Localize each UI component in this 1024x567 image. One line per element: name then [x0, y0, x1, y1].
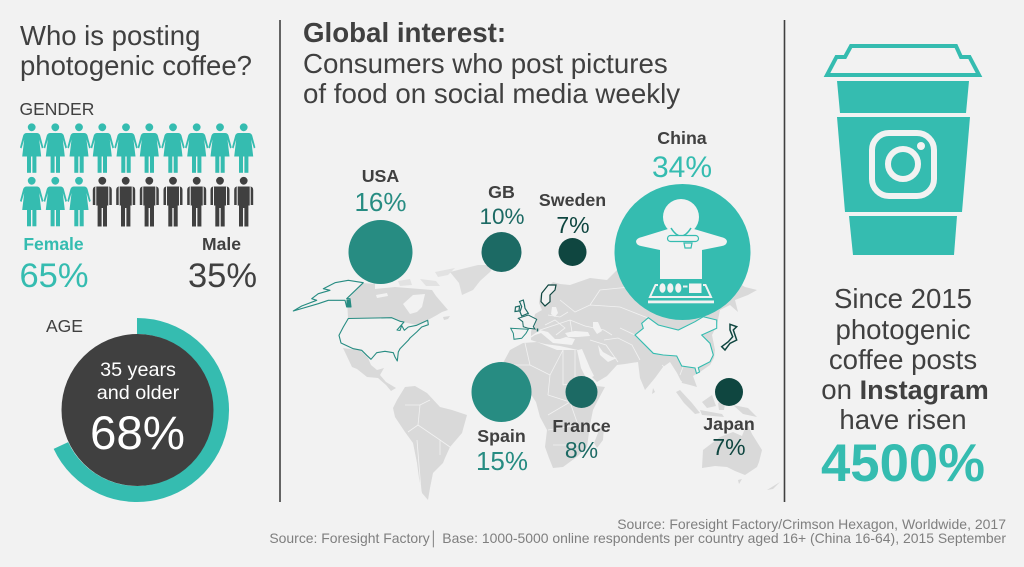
- chart: age donut: 35 years: [100, 359, 176, 381]
- panel: global interest: [293, 17, 780, 500]
- outline: France: [518, 315, 538, 332]
- bubble: France: France: [552, 416, 611, 436]
- divider: left: [279, 20, 281, 502]
- bubble: France: 8%: [565, 437, 598, 463]
- bubble: Sweden: 7%: [556, 212, 590, 238]
- chart: age donut: and older: [97, 382, 180, 404]
- text: instagram statement: Since 2015: [834, 283, 972, 314]
- bubble: France: [552, 376, 611, 463]
- pictogram: gender split: [20, 123, 255, 226]
- stat: 4500%: 4500%: [821, 434, 985, 493]
- bubble: Japan: 7%: [712, 434, 746, 460]
- chart: age donut: 68%: [90, 407, 185, 460]
- source notes: [269, 516, 1006, 548]
- source notes: Source: Foresight Factory/Crimson Hexagon, Worldwide, 2017: [617, 516, 1006, 532]
- label: age: AGE: [46, 316, 83, 336]
- outline: Spain: [511, 328, 528, 339]
- outline: Japan: [722, 324, 737, 350]
- stat: female: [20, 234, 89, 295]
- heading: who is posting: Who is posting: [20, 20, 200, 51]
- chart: age donut: [61, 326, 221, 494]
- stat: male: 35%: [188, 257, 257, 295]
- bubble: China: China: [657, 128, 707, 148]
- stat: female: 65%: [20, 257, 89, 295]
- text: instagram statement: coffee posts: [829, 344, 977, 375]
- panel: who is posting: [20, 20, 257, 494]
- panel: instagram: [821, 46, 989, 493]
- icon: person photographing food: [636, 199, 727, 303]
- bubble: USA: 16%: [354, 187, 407, 217]
- outline: Sweden: [541, 285, 556, 306]
- stat: female: Female: [23, 234, 84, 254]
- heading: global interest: of food on social media weekly: [303, 78, 680, 109]
- bubble: China: 34%: [652, 151, 712, 184]
- text: instagram statement: photogenic: [835, 314, 971, 345]
- text: instagram statement: have risen: [839, 404, 967, 435]
- text: instagram statement: on Instagram: [821, 374, 989, 405]
- stat: male: Male: [202, 234, 241, 254]
- bubble: Spain: 15%: [476, 446, 528, 476]
- outline: GB: [515, 300, 528, 316]
- divider: right: [784, 20, 786, 502]
- icon: coffee cup with instagram logo: [827, 46, 979, 255]
- bubble: Japan: Japan: [703, 414, 755, 434]
- world map: [293, 265, 780, 500]
- heading: who is posting: photogenic coffee?: [20, 50, 252, 81]
- heading: global interest: Consumers who post pictures: [303, 48, 668, 79]
- bubble: USA: [348, 166, 412, 284]
- bubble: Spain: [472, 362, 532, 476]
- outline: China: [635, 317, 717, 374]
- seas and lakes: [376, 293, 617, 378]
- bubble: GB: 10%: [479, 204, 525, 229]
- bubble: USA: USA: [362, 166, 399, 186]
- outline: USA: [293, 280, 428, 361]
- label: gender: GENDER: [20, 99, 94, 119]
- bubble: China: [614, 128, 750, 320]
- bubble: GB: [479, 182, 525, 272]
- bubble: Spain: Spain: [477, 426, 526, 446]
- bubble: Japan: [703, 378, 755, 460]
- bubble: Sweden: [539, 190, 606, 266]
- source notes: Source: Foresight Factory│ Base: 1000-5000 online respondents per country aged 16+ (China 16-64), 2015 September: [269, 530, 1006, 548]
- bubble: GB: GB: [488, 182, 515, 202]
- bubble: Sweden: Sweden: [539, 190, 606, 210]
- stat: male: [188, 234, 257, 295]
- heading: global interest: Global interest:: [303, 17, 506, 48]
